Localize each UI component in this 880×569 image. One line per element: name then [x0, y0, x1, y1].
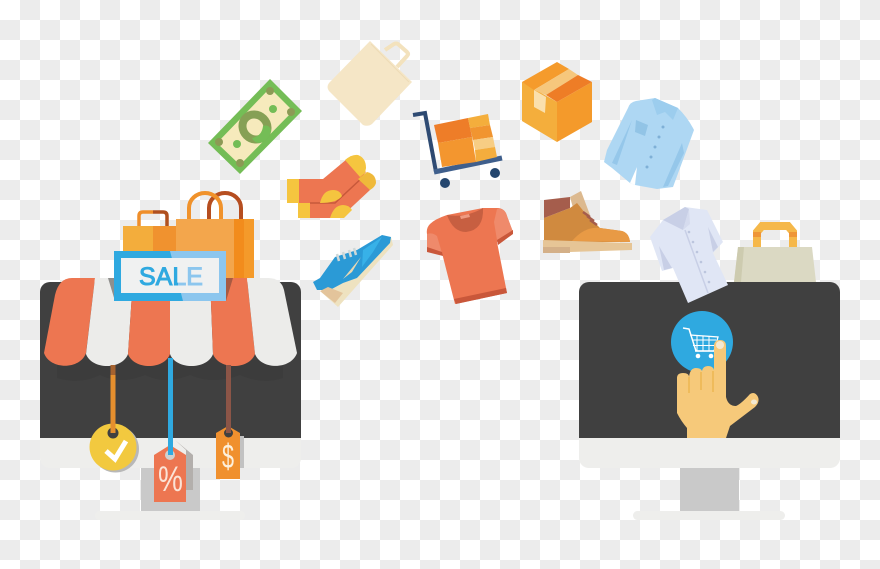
hanging tag: percent — [154, 358, 193, 502]
icon: shopping cart button — [671, 311, 733, 373]
sale sign — [114, 251, 226, 301]
hanging tag: dollar — [216, 365, 244, 479]
left monitor — [40, 282, 301, 520]
icon: cream tote bag — [328, 41, 412, 126]
striped awning — [44, 278, 297, 366]
sale text: SALE — [139, 263, 203, 291]
hanging tag: check circle — [90, 365, 139, 472]
icon: leather boot — [543, 191, 632, 253]
right monitor — [579, 282, 840, 520]
shopping bags on store — [123, 193, 254, 279]
large orange bag — [176, 193, 254, 279]
icon: beige bag — [734, 226, 816, 282]
icon: hand cart with boxes — [413, 113, 502, 188]
small orange bag — [123, 212, 177, 253]
dollar sign: $ — [222, 438, 234, 476]
icon: socks — [287, 155, 376, 218]
icon: cardboard box — [522, 62, 592, 142]
cart glyph — [683, 328, 718, 358]
icon: pointing hand — [677, 340, 759, 438]
icon: running shoe — [313, 235, 393, 307]
icon: t-shirt — [427, 208, 513, 304]
percent sign: % — [158, 459, 183, 499]
icon: blue shirt — [604, 98, 694, 189]
icon: white shirt — [650, 207, 728, 303]
icon: banknote — [208, 79, 302, 174]
